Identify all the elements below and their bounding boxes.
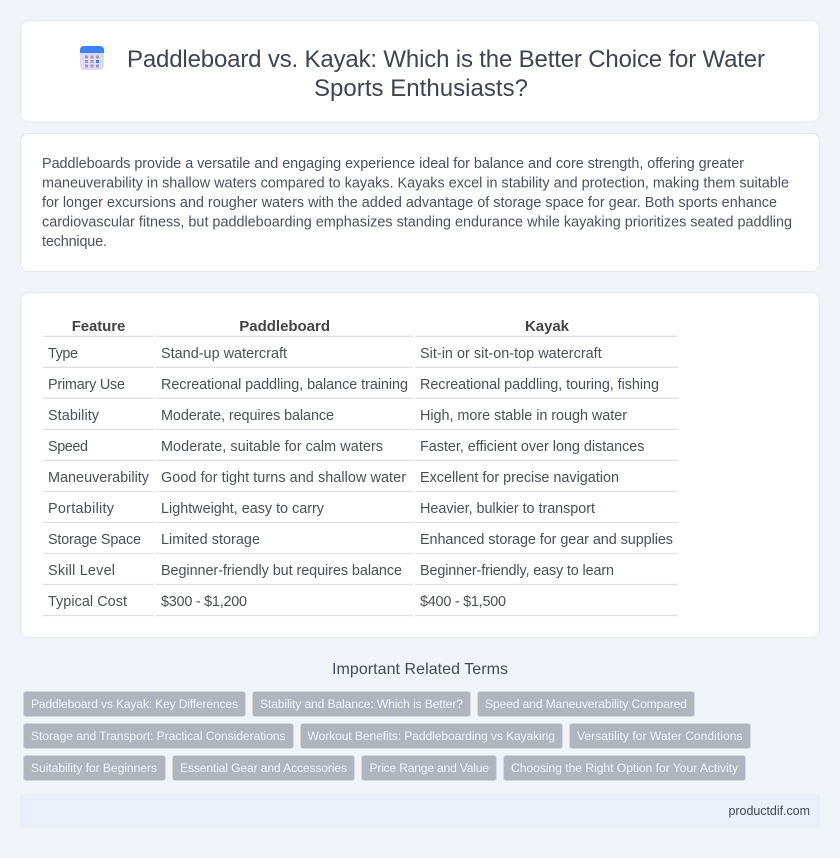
tag: Speed and Maneuverability Compared (485, 697, 687, 711)
table row: portability (48, 501, 595, 517)
tag: Stability and Balance: Which is Better? (260, 697, 463, 711)
table row: skill level: Skill Level (48, 563, 115, 579)
tag: Storage and Transport: Practical Considerations (31, 729, 286, 743)
table row: stability: Moderate, requires balance (161, 408, 334, 424)
text block: introduction (42, 156, 792, 250)
table row: storage space: Storage Space (48, 532, 141, 548)
table row: storage space: Enhanced storage for gear and supplies (420, 532, 673, 548)
table row: maneuverability (48, 470, 619, 486)
table row: primary use (48, 377, 659, 393)
text block: introduction: technique. (42, 234, 107, 250)
panel: introduction (20, 134, 820, 272)
table row: primary use: Primary Use (48, 377, 125, 393)
tag (24, 692, 246, 716)
tag: Versatility for Water Conditions (577, 729, 742, 743)
tag (570, 724, 750, 748)
table row: primary use: Recreational paddling, balance training (161, 377, 408, 393)
table row: storage space: Limited storage (161, 532, 260, 548)
table header (72, 318, 570, 335)
table row: skill level: Beginner-friendly but requires balance (161, 563, 402, 579)
heading: important related terms: Important Related Terms (332, 661, 508, 678)
tag: Paddleboard vs Kayak: Key Differences (31, 697, 238, 711)
table row: typical cost: $400 - $1,500 (420, 594, 506, 610)
text block: introduction: for longer excursions and rougher waters with the added advantage of storage space for gear. Both sports enhance (42, 195, 777, 211)
table row: portability: Lightweight, easy to carry (161, 501, 325, 517)
tag: Suitability for Beginners (31, 761, 157, 775)
tag (172, 756, 354, 780)
title: Paddleboard vs. Kayak: Which is the Better Choice for Water (127, 46, 765, 73)
tag (24, 756, 166, 780)
title: Sports Enthusiasts? (314, 75, 528, 102)
table row: stability (48, 408, 627, 424)
text block: introduction: cardiovascular fitness, but paddleboarding emphasizes standing endurance while kayaking prioritizes seated paddling (42, 214, 792, 230)
tag (362, 756, 496, 780)
tag: Price Range and Value (370, 761, 489, 775)
table row: storage space (48, 532, 673, 548)
table row: maneuverability: Maneuverability (48, 470, 150, 486)
table row: type: Sit-in or sit-on-top watercraft (420, 346, 602, 362)
table row: primary use: Recreational paddling, touring, fishing (420, 377, 659, 393)
table row: speed (48, 439, 644, 455)
tags: related terms (24, 692, 750, 780)
tag: Essential Gear and Accessories (180, 761, 347, 775)
tag (504, 756, 746, 780)
icon: calendar (80, 46, 104, 70)
table row: stability: Stability (48, 408, 100, 424)
table row: speed: Moderate, suitable for calm waters (161, 439, 383, 455)
tag (24, 724, 294, 748)
table row: skill level (48, 563, 614, 579)
table row: typical cost (48, 594, 506, 610)
table row: typical cost: Typical Cost (48, 594, 127, 610)
tag: Choosing the Right Option for Your Activity (511, 761, 739, 775)
table row: speed: Faster, efficient over long distances (420, 439, 644, 455)
table row: type: Stand-up watercraft (161, 346, 287, 362)
table row: portability: Portability (48, 501, 115, 517)
tag (252, 692, 470, 716)
tag: Workout Benefits: Paddleboarding vs Kayaking (308, 729, 555, 743)
table header: Paddleboard (239, 318, 330, 335)
text block: introduction: Paddleboards provide a versatile and engaging experience ideal for balance and core strength, offering greater (42, 156, 744, 172)
table row: type (48, 346, 602, 362)
text block: introduction: maneuverability in shallow waters compared to kayaks. Kayaks excel in stability and protection, making them suitable (42, 176, 789, 192)
table header: Kayak (525, 318, 570, 335)
footer: productdif.com (728, 804, 810, 818)
table row: maneuverability: Good for tight turns and shallow water (161, 470, 406, 486)
tag (300, 724, 562, 748)
table row: speed: Speed (48, 439, 88, 455)
table row: type: Type (48, 346, 78, 362)
table row: stability: High, more stable in rough water (420, 408, 627, 424)
table row: maneuverability: Excellent for precise navigation (420, 470, 619, 486)
table row: typical cost: $300 - $1,200 (161, 594, 247, 610)
panel: comparison table (20, 292, 820, 638)
table row: portability: Heavier, bulkier to transport (420, 501, 595, 517)
table row: skill level: Beginner-friendly, easy to learn (420, 563, 614, 579)
panel: header (20, 20, 820, 122)
footer (20, 794, 820, 828)
title (127, 46, 765, 102)
tag (478, 692, 694, 716)
table header: Feature (72, 318, 125, 335)
